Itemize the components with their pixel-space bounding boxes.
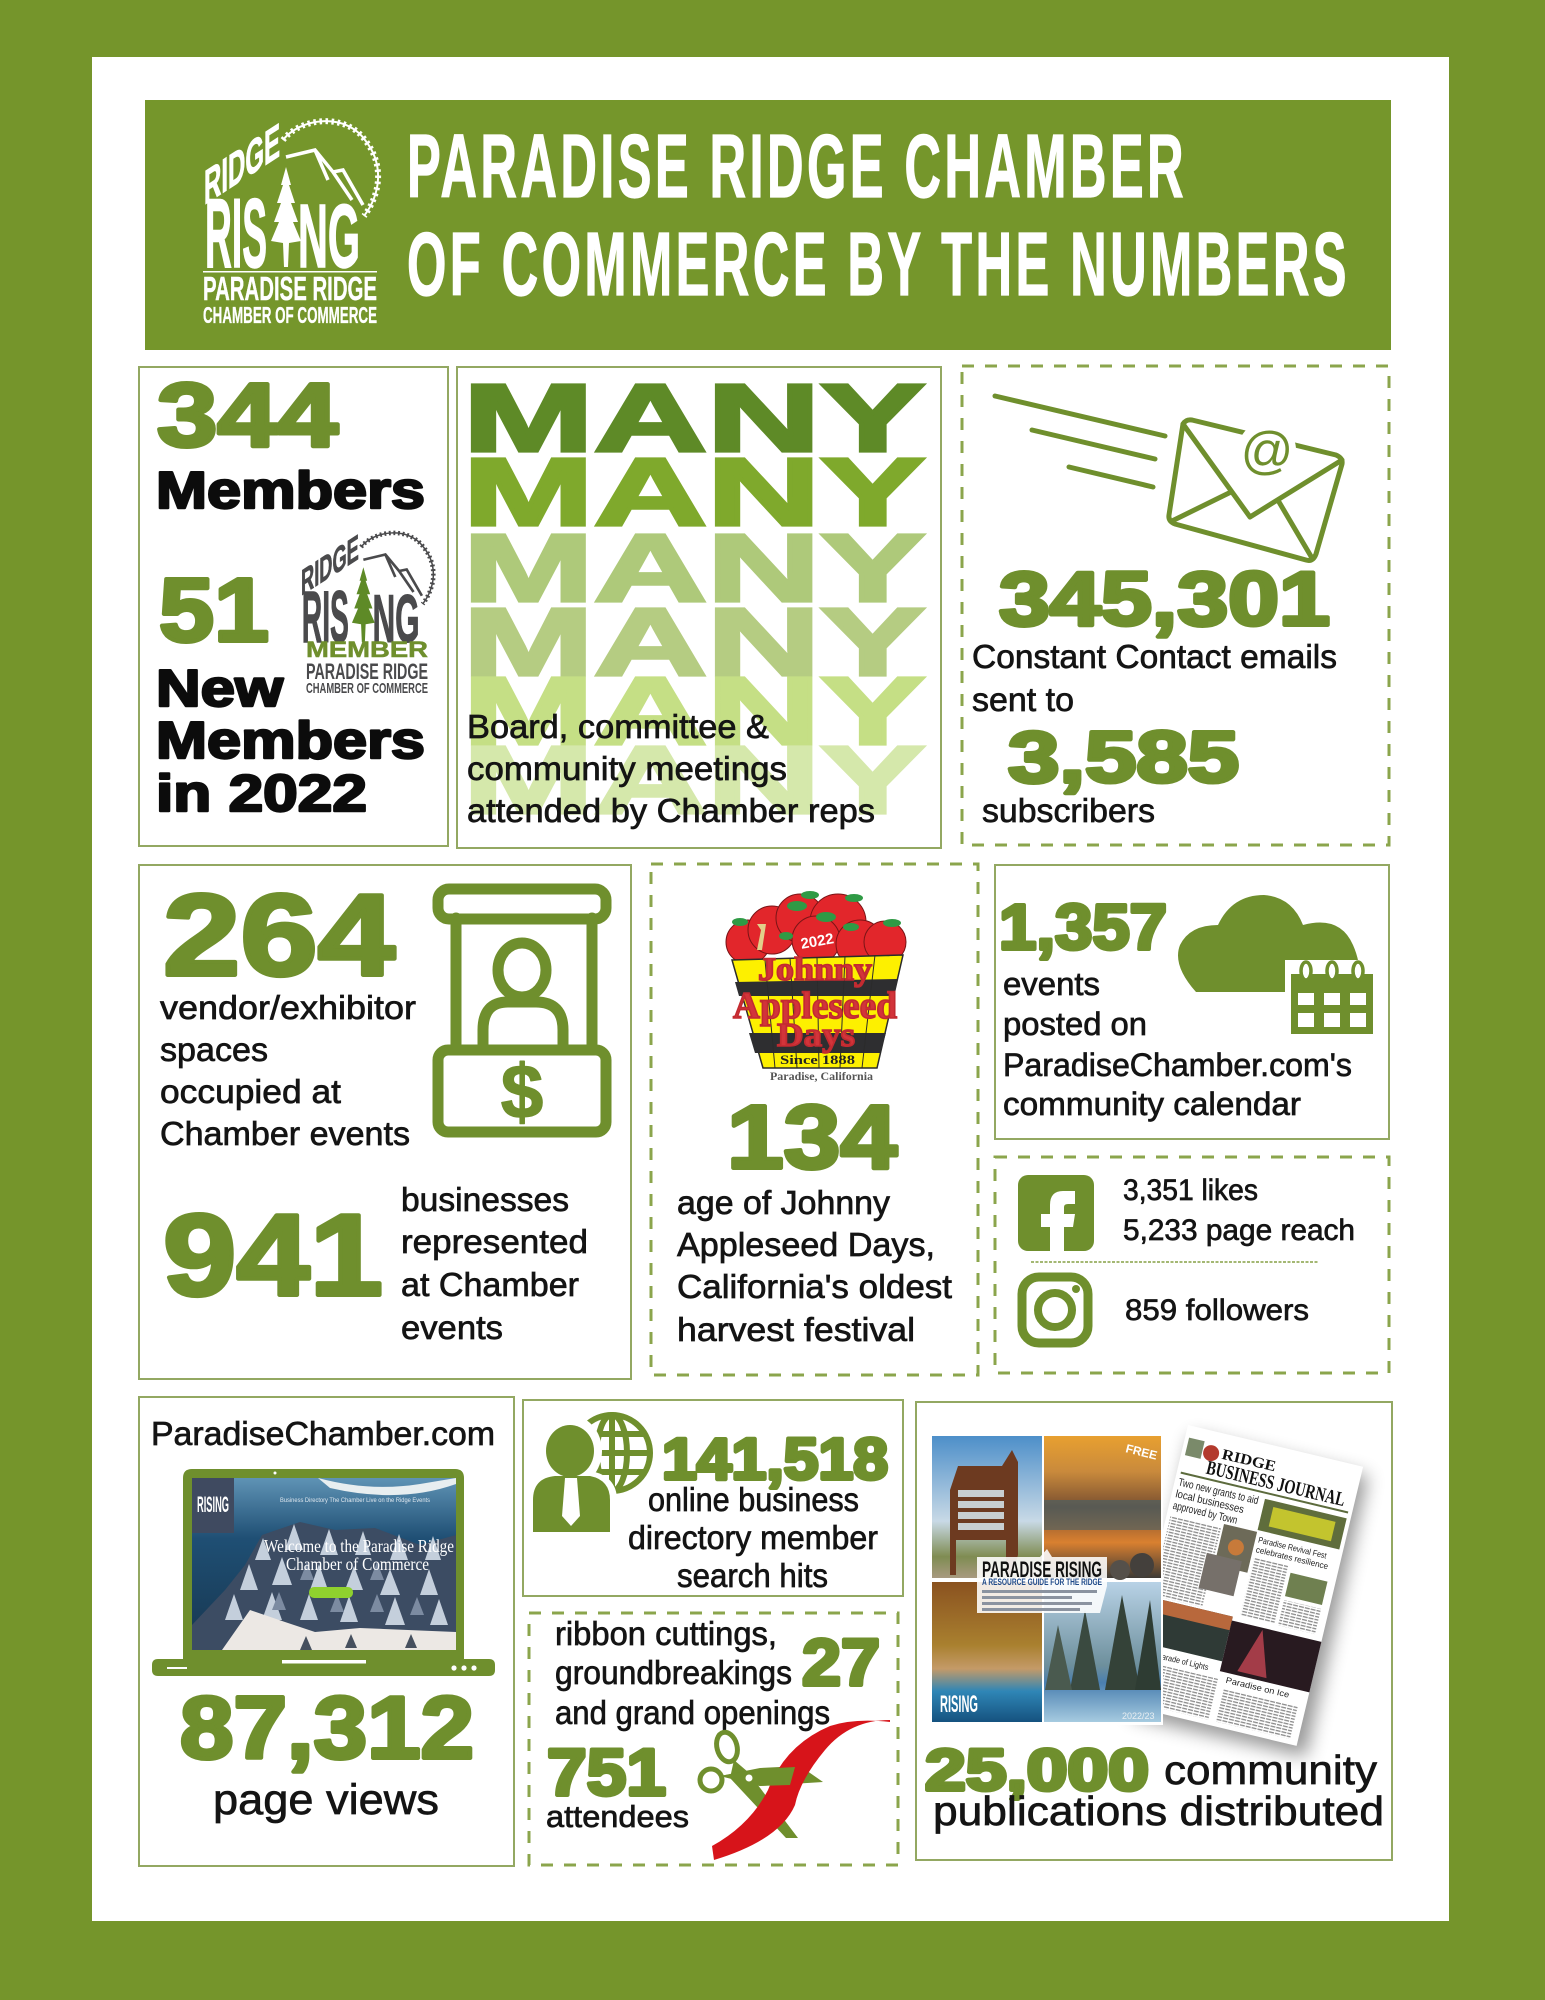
icon: laptop with website screenshot: Business Directory The Chamber Live on the Ridge Events bbox=[280, 1497, 431, 1504]
image: Ridge Business Journal newspaper: Truck Parade of Lights bbox=[1137, 1646, 1210, 1672]
stacked MANY word graphic: MANY bbox=[463, 727, 925, 834]
logo: Ridge Rising: NG bbox=[298, 187, 360, 287]
icon: person with globe bbox=[533, 1415, 650, 1532]
image: Paradise Rising magazine cover bbox=[929, 1433, 1163, 1725]
stat: 941 businesses: businesses bbox=[401, 1181, 569, 1218]
stat: 51 new members: Members bbox=[156, 712, 425, 770]
stat: 344 members: 344 bbox=[157, 366, 338, 466]
image: Ridge Business Journal newspaper: RIDGE bbox=[1220, 1447, 1277, 1475]
stat: subscribers: subscribers bbox=[982, 792, 1155, 829]
image: Paradise Rising magazine cover: PARADISE RISING bbox=[982, 1557, 1102, 1582]
panel: Johnny Appleseed Days bbox=[651, 864, 978, 1375]
stat: 264 vendor spaces: occupied at bbox=[160, 1073, 341, 1110]
icon: scissors cutting ribbon bbox=[700, 1720, 890, 1860]
image: Ridge Business Journal newspaper: BUSINESS JOURNAL bbox=[1204, 1457, 1347, 1511]
stat: 344 members: Members bbox=[156, 462, 425, 520]
facebook stats: 5,233 page reach bbox=[1123, 1214, 1355, 1247]
icon: Ridge Rising member logo: RIDGE bbox=[301, 527, 359, 604]
icon: laptop with website screenshot: Chamber of Commerce bbox=[286, 1554, 429, 1574]
ribbon cuttings caption: groundbreakings bbox=[555, 1654, 792, 1691]
icon: Johnny Appleseed Days basket logo: Johnny bbox=[758, 952, 873, 988]
image: Paradise Rising magazine cover: 2022/23 bbox=[1122, 1711, 1155, 1721]
stat: 141,518 search hits: search hits bbox=[677, 1557, 828, 1594]
panel: many meetings bbox=[457, 365, 941, 848]
website name: ParadiseChamber.com bbox=[151, 1415, 495, 1452]
icon: Johnny Appleseed Days basket logo: 2022 bbox=[799, 930, 835, 953]
stat: 1,357 events: posted on bbox=[1003, 1006, 1147, 1042]
meetings caption: attended by Chamber reps bbox=[467, 792, 875, 829]
stat: 751 attendees bbox=[546, 1735, 689, 1834]
stat: 51 new members: in 2022 bbox=[156, 765, 367, 823]
stat: 134 years: 134 bbox=[727, 1088, 897, 1188]
icon: Johnny Appleseed Days basket logo: Since 1888 bbox=[780, 1052, 856, 1067]
stat: subscribers bbox=[982, 718, 1239, 829]
stat: emails sent: Constant Contact emails bbox=[972, 638, 1337, 675]
stat: 134 years: California's oldest bbox=[677, 1268, 952, 1305]
stat: page views: 87,312 bbox=[180, 1678, 474, 1777]
stat: 141,518 search hits: online business bbox=[648, 1481, 859, 1518]
title bbox=[407, 117, 1350, 315]
facebook stats: 3,351 likes bbox=[1123, 1174, 1258, 1207]
meetings caption bbox=[467, 708, 875, 829]
ribbon cuttings caption: and grand openings bbox=[555, 1694, 830, 1731]
stacked MANY word graphic: MANY bbox=[463, 658, 925, 765]
ribbon cuttings caption: ribbon cuttings, bbox=[555, 1615, 777, 1652]
stat: publications distributed: 25,000 bbox=[925, 1738, 1149, 1803]
icon: laptop with website screenshot bbox=[152, 1469, 495, 1676]
panel: directory hits bbox=[523, 1400, 903, 1596]
stat: 1,357 events: 1,357 bbox=[999, 891, 1167, 963]
panel: ribbon cuttings bbox=[529, 1613, 898, 1865]
stat: 1,357 events: community calendar bbox=[1003, 1086, 1301, 1122]
icon: flying envelope bbox=[995, 396, 1342, 560]
stat: 264 vendor spaces: 264 bbox=[163, 870, 395, 1000]
stat: 264 vendor spaces: Chamber events bbox=[160, 1115, 410, 1152]
stat: emails sent bbox=[972, 557, 1337, 718]
icon: instagram bbox=[1022, 1277, 1088, 1343]
panel: community calendar bbox=[995, 865, 1389, 1139]
stat: 134 years bbox=[677, 1088, 952, 1348]
stat: subscribers: 3,585 bbox=[1008, 718, 1239, 798]
icon: Johnny Appleseed Days basket logo: Paradise, California bbox=[770, 1069, 873, 1083]
stat: 1,357 events: ParadiseChamber.com's bbox=[1003, 1047, 1352, 1083]
stacked MANY word graphic: MANY bbox=[463, 365, 925, 472]
panel: social media bbox=[995, 1157, 1389, 1373]
panel: email stats bbox=[962, 366, 1389, 845]
icon: Ridge Rising member logo: PARADISE RIDGE bbox=[306, 659, 428, 684]
panel: publications bbox=[916, 1402, 1392, 1860]
stat: 1,357 events bbox=[999, 891, 1352, 1122]
stat: 141,518 search hits: 141,518 bbox=[662, 1427, 888, 1492]
stat: publications distributed bbox=[925, 1738, 1384, 1834]
stat: 264 vendor spaces bbox=[160, 870, 416, 1152]
logo: Ridge Rising: RIS bbox=[205, 178, 267, 288]
icon: cloud calendar bbox=[1178, 895, 1380, 1038]
stat: publications distributed: community bbox=[1164, 1747, 1378, 1793]
logo: Ridge Rising: PARADISE RIDGE bbox=[203, 270, 377, 307]
instagram stats: 859 followers bbox=[1125, 1294, 1309, 1327]
stat: 941 businesses: at Chamber bbox=[401, 1266, 579, 1303]
icon: Johnny Appleseed Days basket logo: Days bbox=[777, 1017, 855, 1054]
stacked MANY word graphic: MANY bbox=[463, 589, 925, 696]
panel: website bbox=[139, 1397, 514, 1866]
image: Paradise Rising magazine cover: A RESOURCE GUIDE FOR THE RIDGE bbox=[982, 1577, 1102, 1587]
stat: 134 years: age of Johnny bbox=[677, 1184, 890, 1221]
stat: emails sent: 345,301 bbox=[999, 557, 1330, 642]
stat: 941 businesses: 941 bbox=[163, 1190, 383, 1320]
stat: 51 new members: 51 bbox=[159, 561, 269, 661]
stat: 141,518 search hits: directory member bbox=[628, 1519, 878, 1556]
image: Ridge Business Journal newspaper: celebrates resilience bbox=[1255, 1544, 1329, 1571]
stat: emails sent: sent to bbox=[972, 681, 1074, 718]
header banner bbox=[145, 100, 1391, 350]
image: Ridge Business Journal newspaper: Paradise on Ice bbox=[1225, 1675, 1291, 1700]
icon: flying envelope: @ bbox=[1241, 422, 1293, 480]
image: Ridge Business Journal newspaper: approved by Town bbox=[1171, 1500, 1238, 1527]
logo: Ridge Rising bbox=[203, 113, 378, 328]
stat: page views: page views bbox=[213, 1776, 439, 1824]
stat: publications distributed: publications distributed bbox=[933, 1788, 1384, 1834]
stat: 941 businesses: represented bbox=[401, 1223, 588, 1260]
stat: 27: 27 bbox=[802, 1625, 880, 1699]
icon: vendor booth: $ bbox=[501, 1050, 543, 1135]
icon: laptop with website screenshot: RISING bbox=[197, 1492, 229, 1517]
stat: 51 new members: New bbox=[156, 660, 284, 718]
stacked MANY word graphic bbox=[463, 365, 925, 834]
stat: 264 vendor spaces: spaces bbox=[160, 1031, 268, 1068]
stat: 941 businesses bbox=[163, 1181, 588, 1346]
stat: 751 attendees: attendees bbox=[546, 1799, 689, 1834]
panel: members bbox=[139, 366, 448, 846]
stacked MANY word graphic: MANY bbox=[463, 439, 925, 546]
stat: 344 members bbox=[156, 366, 425, 520]
stat: 264 vendor spaces: vendor/exhibitor bbox=[160, 989, 416, 1026]
stat: 941 businesses: events bbox=[401, 1309, 503, 1346]
logo: Ridge Rising: RIDGE bbox=[204, 113, 280, 216]
icon: Ridge Rising member logo: NG bbox=[372, 582, 420, 657]
icon: vendor booth bbox=[438, 889, 606, 1135]
stat: 134 years: Appleseed Days, bbox=[677, 1226, 935, 1263]
meetings caption: community meetings bbox=[467, 750, 787, 787]
icon: Johnny Appleseed Days basket logo: Appleseed bbox=[733, 985, 897, 1027]
image: Paradise Rising magazine cover: RISING bbox=[940, 1691, 978, 1718]
stat: 141,518 search hits bbox=[628, 1427, 888, 1594]
stat: page views bbox=[180, 1678, 474, 1824]
panel: vendor and business stats bbox=[139, 865, 631, 1379]
stat: 51 new members bbox=[156, 561, 425, 823]
meetings caption: Board, committee & bbox=[467, 708, 769, 745]
icon: Ridge Rising member logo bbox=[301, 527, 433, 697]
icon: Ridge Rising member logo: MEMBER bbox=[306, 637, 428, 662]
icon: Johnny Appleseed Days basket logo bbox=[726, 891, 906, 1083]
stat: 751 attendees: 751 bbox=[547, 1735, 666, 1809]
ribbon cuttings caption bbox=[555, 1615, 830, 1731]
image: Ridge Business Journal newspaper: Two new grants to aid bbox=[1177, 1477, 1260, 1507]
stat: 1,357 events: events bbox=[1003, 966, 1100, 1002]
icon: laptop with website screenshot: Welcome to the Paradise Ridge bbox=[264, 1536, 454, 1556]
icon: facebook bbox=[1018, 1175, 1094, 1251]
facebook stats bbox=[1123, 1174, 1355, 1247]
icon: Ridge Rising member logo: RIS bbox=[302, 576, 349, 658]
image: Paradise Rising magazine cover: FREE bbox=[1124, 1441, 1159, 1463]
icon: Ridge Rising member logo: CHAMBER OF COMMERCE bbox=[306, 680, 428, 697]
image: Ridge Business Journal newspaper bbox=[1121, 1425, 1368, 1757]
logo: Ridge Rising: CHAMBER OF COMMERCE bbox=[203, 302, 377, 328]
image: Ridge Business Journal newspaper: local businesses bbox=[1174, 1488, 1246, 1516]
stat: 134 years: harvest festival bbox=[677, 1311, 915, 1348]
stacked MANY word graphic: MANY bbox=[463, 515, 925, 622]
image: Ridge Business Journal newspaper: Paradise Revival Fest bbox=[1257, 1535, 1328, 1561]
